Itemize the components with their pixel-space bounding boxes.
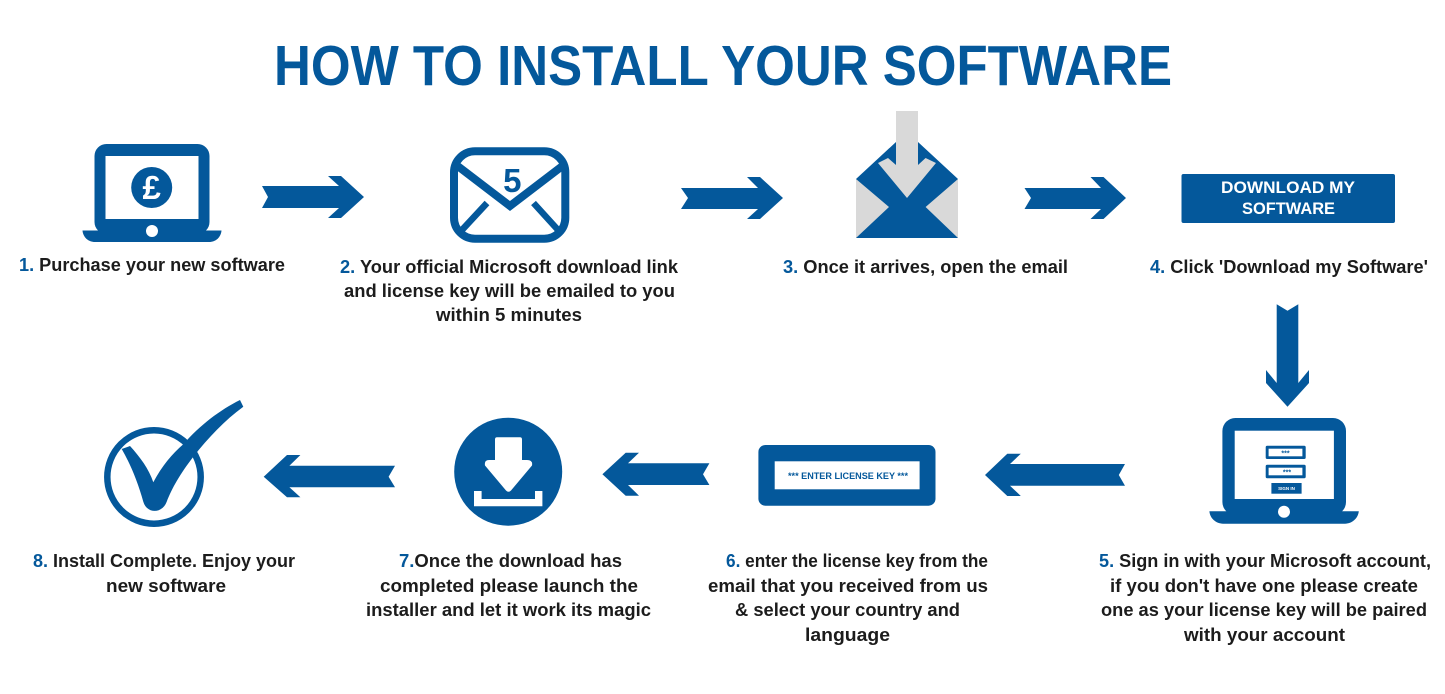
step 8 text: new software <box>106 576 226 596</box>
arrow: step 2 to 3 <box>681 177 783 219</box>
step 6 text: language <box>805 625 890 645</box>
icon: download my software button <box>1182 174 1395 223</box>
arrow: step 3 to 4 <box>1024 177 1126 219</box>
step 2 text: and license key will be emailed to you <box>344 281 675 301</box>
step 2 text: 2. Your official Microsoft download link <box>340 257 679 277</box>
arrow: step 7 to 8 <box>264 455 395 497</box>
icon: download circle <box>454 418 562 526</box>
step 6 text: 6. enter the license key from the <box>726 551 988 571</box>
step 7 text: 7.Once the download has <box>399 551 622 571</box>
step 6 text <box>708 551 988 645</box>
step 2 text <box>340 257 679 325</box>
step 3 text: 3. Once it arrives, open the email <box>783 257 1068 277</box>
step 4 text: 4. Click 'Download my Software' <box>1150 257 1428 277</box>
panel: step 6 license key <box>708 445 988 645</box>
arrow: step 6 to 7 <box>602 453 709 496</box>
step 7 text: completed please launch the <box>380 576 638 596</box>
step 1 text: 1. Purchase your new software <box>19 255 285 275</box>
arrow: step 1 to 2 <box>262 176 364 218</box>
step 5 text: 5. Sign in with your Microsoft account, <box>1099 551 1431 571</box>
icon: envelope with number 5: 5 <box>503 162 521 199</box>
icon: laptop with sign in form <box>1209 418 1359 524</box>
step 5 text <box>1099 551 1431 645</box>
icon: laptop with pound sign <box>82 144 222 242</box>
step 2 text: within 5 minutes <box>435 305 582 325</box>
panel: step 4 download button <box>1150 174 1428 277</box>
panel: step 2 email <box>340 151 679 325</box>
icon: laptop with sign in form: *** <box>1281 450 1290 458</box>
step 6 text: email that you received from us <box>708 576 988 596</box>
step 7 text: installer and let it work its magic <box>366 600 651 620</box>
panel: step 3 open email <box>783 111 1068 277</box>
icon: laptop with sign in form: SIGN IN <box>1278 486 1295 491</box>
icon: envelope with number 5 <box>454 151 565 239</box>
panel: step 7 launch installer <box>366 418 651 620</box>
title: HOW TO INSTALL YOUR SOFTWARE <box>274 34 1172 97</box>
step 6 text: & select your country and <box>735 600 960 620</box>
panel: step 1 purchase <box>19 144 285 275</box>
icon: enter license key box <box>758 445 936 506</box>
icon: laptop with sign in form: *** <box>1283 470 1291 476</box>
panel: step 8 complete <box>33 400 295 596</box>
step 7 text <box>366 551 651 620</box>
icon: enter license key box: *** ENTER LICENSE KEY *** <box>788 471 908 482</box>
step 5 text: one as your license key will be paired <box>1101 600 1427 620</box>
step 8 text <box>33 551 295 596</box>
icon: check mark in circle <box>107 400 243 524</box>
panel: step 5 sign in <box>1099 418 1431 645</box>
icon: download my software button: SOFTWARE <box>1242 200 1335 218</box>
step 5 text: with your account <box>1183 625 1345 645</box>
icon: download my software button: DOWNLOAD MY <box>1221 179 1355 197</box>
step 8 text: 8. Install Complete. Enjoy your <box>33 551 295 571</box>
arrow: step 4 to 5 <box>1266 304 1309 407</box>
icon: open envelope with incoming arrow <box>856 111 958 238</box>
icon: laptop with pound sign: £ <box>143 169 162 206</box>
step 5 text: if you don't have one please create <box>1110 576 1418 596</box>
arrow: step 5 to 6 <box>985 454 1125 496</box>
